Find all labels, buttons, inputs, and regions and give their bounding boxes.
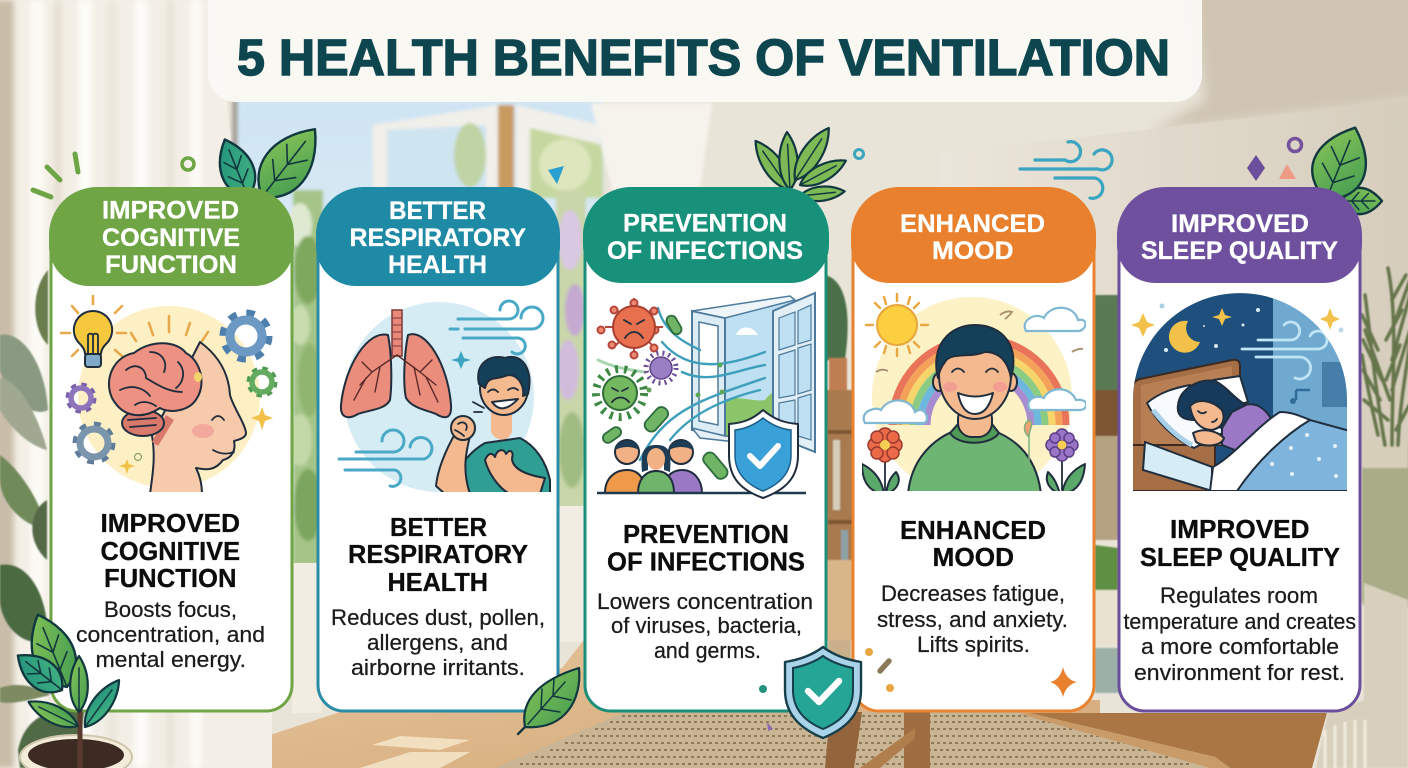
panel: better respiratory health	[316, 187, 560, 711]
header	[1117, 187, 1362, 283]
title banner	[208, 0, 1202, 102]
body heading: COGNITIVE	[100, 536, 240, 566]
lungs	[341, 310, 451, 417]
stars outside the arch	[1131, 313, 1155, 337]
body heading: SLEEP QUALITY	[1140, 542, 1340, 572]
panel: enhanced mood	[851, 187, 1096, 711]
panel: improved sleep quality	[1117, 187, 1362, 711]
body heading: MOOD	[932, 542, 1014, 572]
wind icon above cards 4 and 5	[1020, 142, 1112, 198]
palm plant on right	[1362, 268, 1408, 445]
body text: airborne irritants.	[351, 655, 525, 680]
body text: mental energy.	[96, 647, 246, 672]
body text: allergens, and	[367, 630, 508, 655]
back pillow	[1213, 376, 1248, 408]
mattress	[1143, 442, 1212, 491]
body heading	[348, 512, 528, 597]
hair	[1178, 380, 1246, 428]
header label: OF INFECTIONS	[607, 237, 803, 265]
floating leaf bottom center	[518, 668, 579, 734]
header	[316, 187, 560, 286]
header	[49, 187, 294, 286]
clouds	[864, 308, 1086, 423]
flowers	[862, 420, 1085, 494]
body text	[76, 597, 265, 672]
body heading: PREVENTION	[623, 519, 789, 549]
body heading: OF INFECTIONS	[607, 546, 805, 576]
blue shield	[729, 410, 798, 498]
small decorative marks	[548, 166, 773, 731]
body heading: FUNCTION	[104, 563, 236, 593]
illustration: sleeping person under night sky	[1130, 285, 1353, 495]
wind lines	[339, 301, 543, 486]
sofa and blanket	[1316, 440, 1408, 768]
illustration: brain and gears	[61, 296, 274, 494]
light bulb	[61, 296, 126, 367]
hand	[1193, 430, 1224, 445]
headboard	[1132, 360, 1240, 445]
header label: BETTER	[389, 197, 486, 225]
header label: MOOD	[932, 237, 1014, 265]
brain	[109, 343, 201, 415]
illustration: smiling person and rainbow	[862, 294, 1086, 497]
sparkles	[251, 407, 273, 430]
rainbow	[892, 338, 1066, 425]
body text: and germs.	[654, 638, 761, 663]
wind streams	[640, 308, 765, 460]
decorative shapes behind card 5	[1247, 118, 1382, 214]
sunlight patches on floor	[360, 736, 470, 768]
body text: Boosts focus,	[104, 597, 237, 622]
teal shield badge bottom	[785, 647, 861, 738]
wooden shelf and plant between cards 3 and 4	[825, 275, 855, 712]
person	[436, 357, 550, 494]
illustration: lungs and person breathing	[339, 301, 550, 494]
body text: Reduces dust, pollen,	[331, 605, 545, 630]
face	[1190, 401, 1224, 430]
body text	[597, 589, 813, 663]
body text: Decreases fatigue,	[881, 581, 1065, 606]
body text: Lowers concentration	[597, 589, 813, 614]
blanket	[1236, 420, 1350, 491]
body heading: RESPIRATORY	[348, 539, 528, 569]
green virus	[596, 369, 644, 417]
left curtain	[0, 0, 272, 768]
body text: concentration, and	[76, 622, 265, 647]
sheer curtain right of window	[591, 103, 712, 190]
body heading: HEALTH	[388, 567, 488, 597]
header label: ENHANCED	[900, 210, 1045, 238]
panel: improved cognitive function	[49, 187, 294, 711]
window	[692, 293, 815, 452]
header label: IMPROVED	[1171, 210, 1309, 238]
decorative sprig behind card 3	[748, 123, 864, 203]
head profile	[150, 342, 246, 494]
header label	[607, 210, 803, 265]
body text	[331, 605, 545, 680]
body text: Lifts spirits.	[917, 632, 1030, 657]
fiddle leaf plant on left	[0, 270, 85, 768]
header label: IMPROVED	[102, 196, 239, 224]
body text: temperature and creates	[1124, 609, 1356, 634]
hand on chest	[485, 450, 545, 494]
purple virus	[646, 353, 676, 383]
potted sprout bottom left	[9, 607, 132, 768]
decorative leaves behind card 1	[33, 115, 333, 211]
header label: HEALTH	[388, 251, 487, 279]
header label: COGNITIVE	[102, 224, 240, 252]
body heading	[100, 508, 240, 593]
header	[583, 187, 829, 283]
header label	[102, 196, 240, 279]
floor	[270, 632, 1100, 768]
gears	[68, 314, 274, 461]
illustration: germs, window, family, shield	[596, 293, 815, 498]
body text	[877, 581, 1068, 657]
header label: FUNCTION	[105, 251, 237, 279]
family group	[597, 440, 806, 493]
title text: 5 HEALTH BENEFITS OF VENTILATION	[237, 29, 1170, 86]
header label	[350, 197, 526, 279]
header label: SLEEP QUALITY	[1141, 237, 1338, 265]
body text	[1124, 583, 1356, 685]
rug	[495, 712, 1215, 768]
window sills and wall between cards	[292, 563, 322, 713]
header label: RESPIRATORY	[350, 224, 526, 252]
ceiling shadow at top right	[1150, 0, 1408, 132]
body text: environment for rest.	[1134, 660, 1345, 685]
body heading: IMPROVED	[1170, 514, 1310, 544]
bacteria	[601, 314, 730, 481]
cerebellum and brain stem	[152, 415, 174, 446]
body	[1222, 404, 1274, 452]
header label	[1141, 210, 1338, 265]
window with garden view	[232, 100, 604, 565]
person	[908, 325, 1041, 494]
header label: PREVENTION	[623, 210, 787, 238]
wooden stool and bench	[825, 712, 1327, 768]
front pillow	[1147, 385, 1228, 448]
shelf, plant and books between cards 4 and 5	[1093, 295, 1121, 693]
moon	[1169, 321, 1200, 353]
decorative dots and star	[865, 648, 1077, 697]
body heading	[1140, 514, 1340, 572]
right wall	[940, 100, 1408, 470]
header label	[900, 210, 1045, 265]
body text: a more comfortable	[1141, 634, 1339, 659]
red virus	[598, 298, 663, 358]
body text: Regulates room	[1160, 583, 1318, 608]
panel: prevention of infections	[583, 187, 829, 711]
body heading: IMPROVED	[100, 508, 240, 538]
wind inside window	[1242, 322, 1327, 379]
body text: stress, and anxiety.	[877, 607, 1068, 632]
bed base	[1132, 445, 1215, 491]
body heading: BETTER	[390, 512, 487, 542]
body text: of viruses, bacteria,	[611, 613, 802, 638]
body heading	[607, 519, 805, 576]
sun	[866, 294, 928, 356]
body heading	[900, 515, 1046, 572]
header	[851, 187, 1096, 283]
body heading: ENHANCED	[900, 515, 1046, 545]
